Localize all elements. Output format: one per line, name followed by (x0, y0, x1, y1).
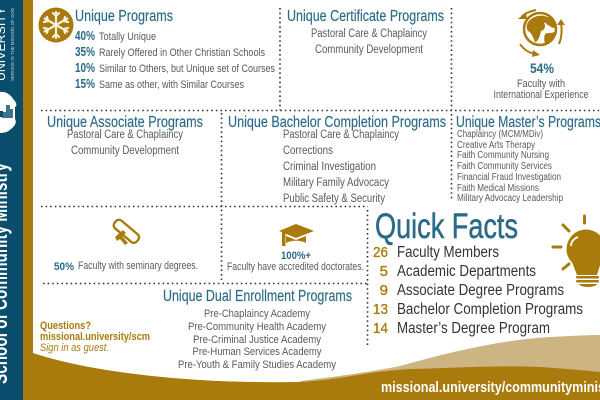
panel: unique master's programs: Faith Community Services (457, 161, 552, 172)
panel: seminary degrees: Faculty with seminary degrees. (78, 260, 198, 272)
panel: unique dual enrollment programs: Pre-Youth & Family Studies Academy (178, 359, 336, 371)
panel: unique master's programs: Financial Fraud Investigation (457, 172, 561, 183)
panel: unique dual enrollment programs: Pre-Community Health Academy (188, 321, 326, 333)
panel: unique bachelor completion programs: Public Safety & Security (283, 193, 385, 205)
panel: international experience: 54% (530, 60, 554, 76)
panel: unique bachelor completion programs: Pastoral Care & Chaplaincy (283, 129, 399, 141)
dotted dividers (41, 8, 600, 345)
callout: questions (40, 320, 150, 354)
panel: quick facts: 13 (373, 301, 388, 318)
panel: unique programs: 10% (75, 61, 95, 75)
panel: unique dual enrollment programs: Pre-Human Services Academy (192, 346, 322, 358)
panel: unique certificate programs (287, 8, 444, 56)
icon: snowflake (38, 8, 74, 42)
panel: unique certificate programs: Unique Certificate Programs (287, 8, 444, 25)
panel: unique programs: 35% (75, 45, 95, 59)
panel: unique master's programs: Creative Arts Therapy (457, 140, 535, 151)
panel: unique master's programs: Faith Community Nursing (457, 150, 549, 161)
callout: questions: missional.university/scm (40, 331, 150, 343)
callout: questions: Questions? (40, 320, 91, 332)
panel: unique associate programs: Pastoral Care & Chaplaincy (67, 129, 183, 141)
icon: graduation cap (279, 224, 314, 246)
panel: seminary degrees (54, 218, 198, 273)
panel: unique bachelor completion programs (228, 114, 446, 205)
icon: diploma scroll (112, 218, 141, 245)
panel: unique bachelor completion programs: Corrections (283, 145, 333, 157)
icon: globe with arrows (518, 10, 565, 57)
panel: quick facts: Faculty Members (397, 244, 499, 261)
panel: quick facts: Associate Degree Programs (397, 282, 564, 299)
panel: unique master's programs (456, 114, 600, 204)
panel: unique master's programs: Chaplaincy (MCM/MDiv) (457, 129, 543, 140)
panel: accredited doctorates: 100%+ (281, 250, 311, 262)
panel: quick facts (373, 207, 583, 337)
panel: unique programs: Rarely Offered in Other Christian Schools (99, 47, 265, 59)
panel: unique programs: 40% (75, 29, 95, 43)
panel: unique bachelor completion programs: Unique Bachelor Completion Programs (228, 114, 446, 131)
panel: accredited doctorates (227, 224, 364, 273)
panel: unique associate programs: Unique Associate Programs (47, 114, 203, 131)
panel: unique master's programs: Military Advocacy Leadership (457, 193, 563, 204)
panel: unique programs (75, 8, 275, 91)
icon: light bulb (553, 216, 600, 287)
panel: unique associate programs (47, 114, 203, 157)
panel: seminary degrees: 50% (54, 261, 74, 273)
callout: questions: Sign in as guest. (40, 342, 109, 354)
panel: accredited doctorates: Faculty have accredited doctorates. (227, 261, 364, 273)
panel: unique associate programs: Community Development (71, 145, 180, 157)
panel: quick facts: 14 (373, 320, 388, 337)
panel: unique programs: Same as other, with Similar Courses (99, 79, 244, 91)
background waves (33, 335, 600, 400)
panel: unique bachelor completion programs: Military Family Advocacy (283, 177, 389, 189)
sidebar (0, 0, 33, 400)
panel: quick facts: 26 (373, 244, 388, 261)
panel: unique programs: Totally Unique (99, 31, 156, 43)
panel: quick facts: Academic Departments (397, 263, 536, 280)
logo tagline: SERVICE IN THE MISSION OF GOD (10, 7, 15, 81)
panel: unique dual enrollment programs: Pre-Criminal Justice Academy (193, 334, 321, 346)
panel: unique certificate programs: Pastoral Care & Chaplaincy (311, 28, 427, 40)
panel: unique dual enrollment programs: Unique Dual Enrollment Programs (163, 288, 352, 305)
logo globe emblem (0, 92, 16, 133)
panel: unique dual enrollment programs (163, 288, 352, 371)
panel: unique programs: 15% (75, 77, 95, 91)
panel: unique programs: Similar to Others, but Unique set of Courses (99, 63, 275, 75)
panel: unique dual enrollment programs: Pre-Chaplaincy Academy (204, 308, 310, 320)
panel: international experience: Faculty with (517, 78, 565, 90)
panel: unique programs: Unique Programs (75, 8, 173, 25)
panel: quick facts: 9 (380, 282, 388, 299)
panel: international experience (494, 10, 588, 101)
panel: quick facts: 5 (380, 263, 388, 280)
panel: quick facts: Quick Facts (375, 207, 518, 246)
panel: unique certificate programs: Community Development (315, 44, 424, 56)
panel: unique bachelor completion programs: Criminal Investigation (283, 161, 376, 173)
panel: unique master's programs: Faith Medical Missions (457, 183, 539, 194)
panel: quick facts: Master’s Degree Program (397, 320, 550, 337)
